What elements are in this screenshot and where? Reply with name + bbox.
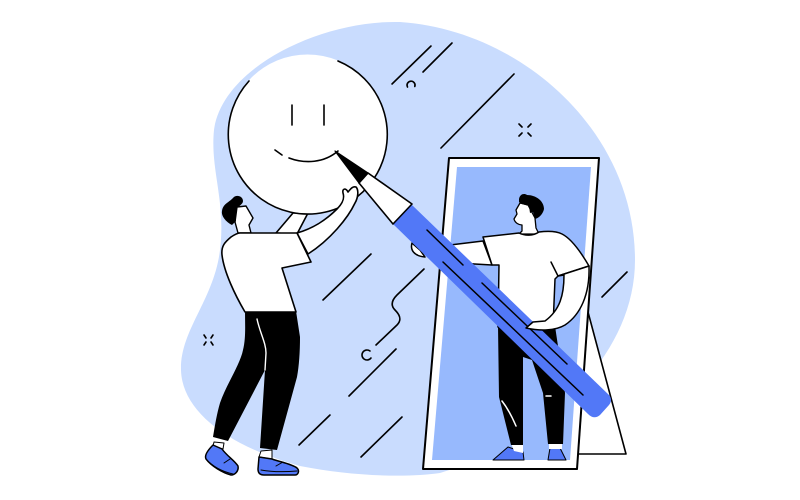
back arm: [276, 213, 308, 234]
small open circles: [362, 81, 415, 360]
large smiley circle: [228, 54, 387, 214]
reflection: shirt: [483, 231, 589, 327]
reflection: socks: [511, 443, 562, 453]
right shoe: [258, 457, 298, 475]
hair: [222, 196, 243, 225]
trousers: [213, 311, 300, 450]
reflection: outstretched arm: [440, 241, 492, 265]
pencil tip: [335, 151, 368, 183]
reflection: sleeve crease: [551, 262, 558, 276]
mirror frame: [423, 158, 599, 469]
pencil lines: [427, 230, 583, 395]
socks: [213, 442, 272, 459]
smile: [275, 150, 338, 162]
circle disc: [228, 54, 387, 214]
front arm and hand: [297, 187, 358, 254]
reflection: hand behind pencil: [412, 243, 425, 257]
sparkle: left: [204, 335, 213, 345]
trouser seam: [257, 319, 266, 370]
giant pencil: [335, 151, 611, 417]
mirror stand: [578, 312, 626, 454]
left shoe: [206, 445, 238, 475]
diagonal glass lines: [299, 43, 627, 457]
shirt: [222, 233, 311, 312]
reflection: trouser highlights: [502, 396, 551, 426]
left eye: [291, 105, 293, 125]
reflection: face and neck: [514, 203, 539, 234]
pencil body: [393, 205, 611, 417]
reflection: shoes: [493, 447, 566, 460]
reflection: hair: [519, 194, 544, 219]
shoe details: [206, 459, 297, 474]
left person: [206, 54, 387, 475]
reflected person: [412, 194, 589, 460]
background blob: [181, 22, 635, 476]
reflection: hand and forearm over pencil: [526, 266, 589, 330]
reflection: trousers: [498, 326, 565, 445]
circle outline: [228, 61, 387, 214]
neck and face: [235, 206, 253, 233]
pencil collar: [359, 173, 412, 224]
mirror glass: [432, 167, 591, 460]
sparkle: top right: [519, 124, 531, 136]
right eye: [323, 105, 325, 125]
